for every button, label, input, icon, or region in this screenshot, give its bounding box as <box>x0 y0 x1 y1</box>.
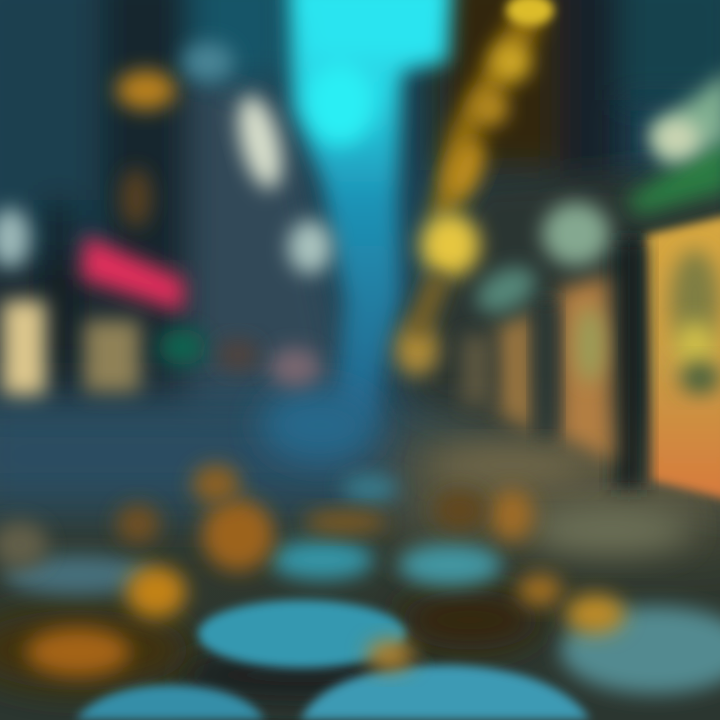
large orange panel <box>645 215 720 500</box>
mid orange panel <box>558 275 614 462</box>
orange sign <box>116 70 176 110</box>
left buildings <box>0 0 350 410</box>
cyan table tops <box>198 600 406 668</box>
pink neon sign <box>80 235 185 312</box>
left neon and lights <box>0 42 332 395</box>
street glow <box>260 387 380 463</box>
yellow light chain <box>395 0 554 376</box>
right shopfronts <box>462 70 720 500</box>
pale green signs <box>542 202 610 266</box>
green awning <box>625 130 720 215</box>
green sign <box>158 329 206 365</box>
white lights <box>230 91 290 193</box>
right buildings <box>400 0 720 520</box>
foreground tables <box>0 447 720 720</box>
dark table bases <box>170 649 430 701</box>
cyan sky column <box>288 0 452 420</box>
dark pillar <box>614 240 644 490</box>
cream windows <box>2 300 46 395</box>
orange accents <box>126 566 186 618</box>
small orange panel <box>498 312 536 432</box>
street and tables base <box>0 400 720 540</box>
